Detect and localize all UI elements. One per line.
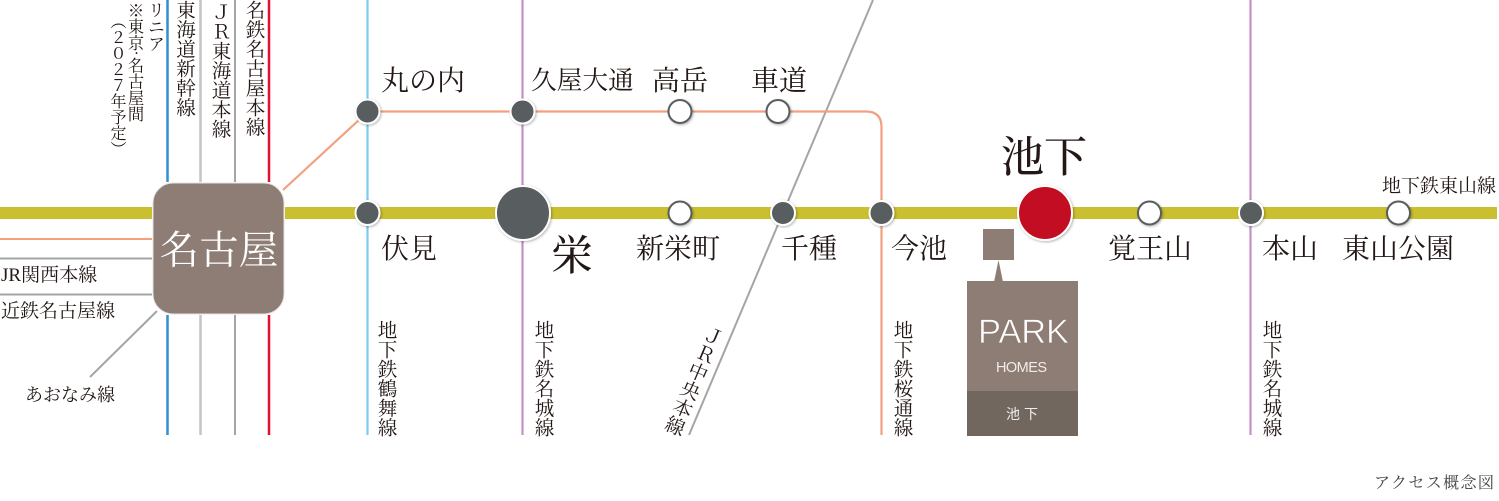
station labels: lower: 伏見: [381, 233, 437, 265]
labels: west lines: あおなみ線: [25, 385, 115, 405]
station markers: dark: [356, 100, 1263, 240]
station labels: lower: 千種: [781, 233, 837, 265]
labels: top vertical lines: 名古屋間: [125, 57, 144, 122]
line: Meitetsu: [268, 0, 270, 435]
labels: top vertical lines: リニア: [145, 1, 164, 52]
station label: Ikeshita: 池下: [1001, 135, 1087, 182]
station labels: lower: 東山公園: [1342, 233, 1454, 265]
labels: top vertical lines: ※東京: [125, 2, 144, 51]
station: Nagoya: 名古屋: [160, 229, 278, 273]
labels: bottom vertical lines: [374, 320, 1282, 437]
labels: top vertical lines: ＪＲ東海道本線: [208, 2, 231, 138]
line: Tokaido Shinkansen: [166, 0, 169, 435]
station labels: lower: 今池: [891, 233, 947, 265]
line: JR Tokaido main: [234, 0, 236, 435]
station labels: upper: 久屋大通: [531, 66, 634, 95]
labels: bottom vertical lines: 地下鉄桜通線: [890, 320, 913, 437]
labels: top vertical lines: （２０２７年予定）: [108, 13, 126, 157]
logo: Park Homes Ikeshita: HOMES: [996, 360, 1047, 376]
caption: アクセス概念図: [1374, 474, 1495, 492]
labels: top vertical lines: ・: [129, 48, 140, 58]
station markers: white: [668, 100, 1410, 224]
labels: west lines: [1, 264, 115, 405]
station label: Sakae: 栄: [551, 234, 593, 280]
logo: Park Homes Ikeshita: 池下: [1006, 406, 1042, 422]
station: Nagoya: [153, 183, 284, 314]
labels: top vertical lines: [108, 0, 265, 157]
line: Higashiyama: [0, 207, 1497, 219]
lines: west of Nagoya: [0, 239, 157, 377]
line: Meijo east: [1249, 0, 1252, 435]
logo: Park Homes Ikeshita: PARK: [978, 313, 1069, 351]
labels: top vertical lines: 名鉄名古屋本線: [242, 0, 265, 136]
station labels: lower: 本山: [1262, 233, 1318, 265]
labels: west lines: JR関西本線: [1, 264, 97, 286]
logo: Park Homes Ikeshita: [967, 281, 1078, 436]
station labels: upper: 丸の内: [381, 65, 465, 97]
label: Higashiyama line: 地下鉄東山線: [1382, 175, 1496, 197]
station labels: lower: 新栄町: [636, 233, 720, 265]
station marker: Ikeshita: [1018, 186, 1072, 240]
line: JR Tokaido light gray: [199, 0, 202, 435]
station labels: upper: [381, 65, 807, 97]
labels: bottom vertical lines: 地下鉄名城線: [1260, 320, 1282, 437]
labels: bottom vertical lines: 地下鉄鶴舞線: [374, 320, 397, 437]
station labels: upper: 車道: [751, 65, 807, 97]
labels: west lines: 近鉄名古屋線: [1, 300, 115, 322]
line: Tsurumai: [366, 0, 369, 435]
line: Meijo west: [521, 0, 524, 435]
station labels: lower: 覚王山: [1108, 233, 1192, 265]
station labels: lower: [381, 233, 1454, 265]
label: JR Chuo line: ＪＲ中央本線: [660, 322, 726, 438]
line: JR Chuo: [689, 0, 873, 435]
line: Sakura-dori: [283, 112, 882, 435]
labels: top vertical lines: 東海道新幹線: [173, 0, 196, 117]
station labels: upper: 高岳: [652, 65, 708, 97]
marker: Park Homes location: [983, 229, 1014, 282]
labels: bottom vertical lines: 地下鉄名城線: [532, 320, 554, 437]
